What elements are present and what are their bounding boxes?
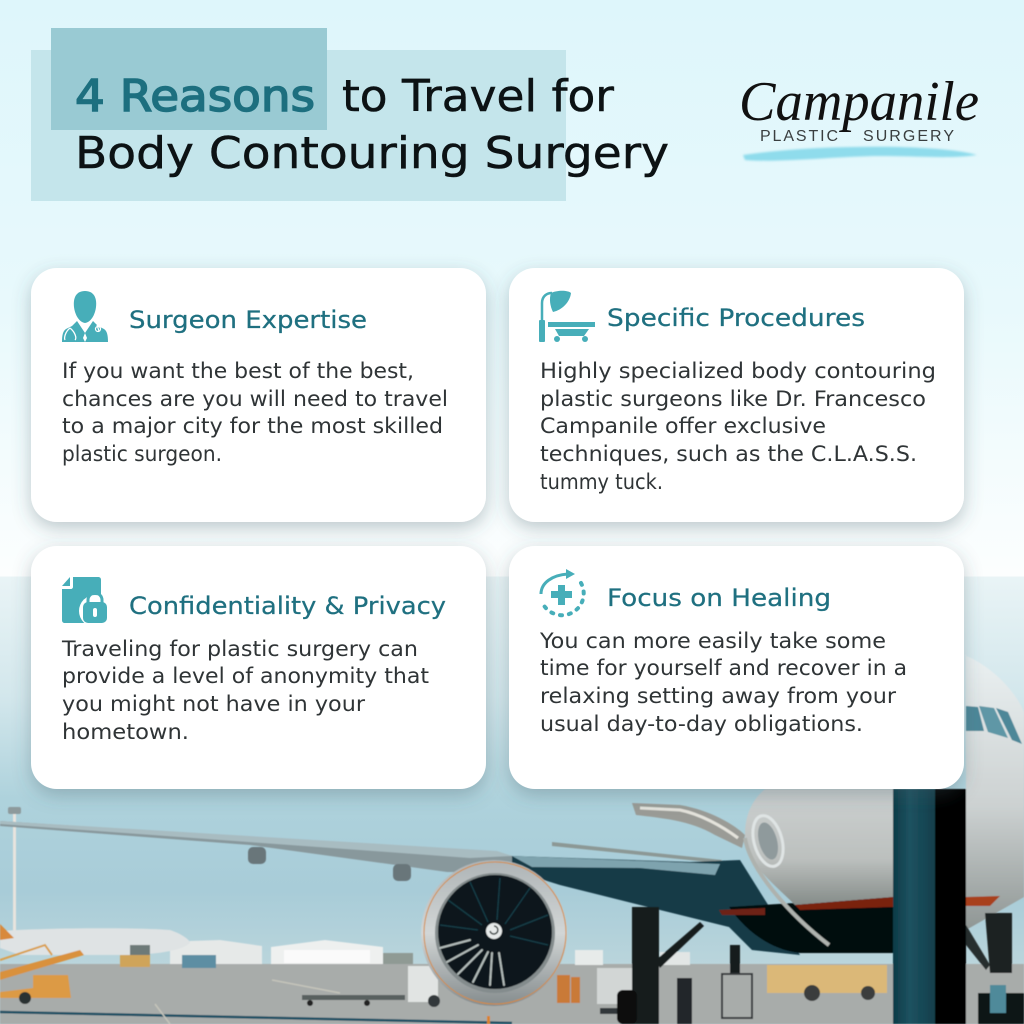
landing gear (617, 907, 704, 1024)
icon: operating table and lamp (539, 291, 595, 342)
window pillar (893, 789, 966, 1024)
panel: confidentiality and privacy (31, 546, 486, 789)
title block (31, 28, 669, 201)
fuselage far side (964, 655, 1024, 930)
heading: Confidentiality & Privacy (129, 592, 446, 620)
body text: You can more easily take some (539, 629, 886, 653)
title line two: Body Contouring Surgery (75, 128, 669, 179)
wing (0, 821, 520, 881)
body text: relaxing setting away from your (540, 684, 896, 708)
distant hangars (170, 940, 690, 968)
body text: plastic surgeon. (62, 442, 222, 466)
icon: doctor (62, 291, 108, 342)
ground vehicles (120, 955, 887, 1014)
body text: plastic surgeons like Dr. Francesco (540, 387, 926, 411)
title accent words: 4 Reasons (75, 71, 315, 122)
jet engine (421, 860, 567, 1006)
ground (0, 964, 1024, 1024)
body text: Traveling for plastic surgery can (61, 637, 418, 661)
body text: provide a level of anonymity that (62, 664, 429, 688)
fuselage nose section (719, 789, 893, 945)
baggage loader (0, 945, 84, 1004)
body text: hometown. (62, 720, 189, 744)
body text: Highly specialized body contouring (540, 359, 936, 383)
panel: specific procedures (509, 268, 964, 522)
body text (61, 637, 429, 744)
heading: Focus on Healing (607, 584, 831, 612)
logo: Campanile Plastic Surgery (739, 71, 979, 161)
icon: document with padlock (62, 577, 111, 627)
logo tagline surgery: SURGERY (863, 128, 954, 145)
body text (62, 359, 448, 466)
distant airliner (0, 924, 190, 955)
title highlight large (31, 50, 566, 201)
body text: If you want the best of the best, (62, 359, 414, 383)
title line one: to Travel for (342, 71, 615, 122)
logo brush stroke (743, 147, 977, 161)
light mast (8, 807, 21, 940)
nose gear and worker (966, 913, 1024, 1024)
body text: Campanile offer exclusive (540, 414, 826, 438)
body text: time for yourself and recover in a (540, 656, 907, 680)
wing root and belly (512, 842, 893, 955)
body text: tummy tuck. (540, 470, 663, 494)
cone marker (487, 1016, 490, 1024)
body text: chances are you will need to travel (62, 387, 448, 411)
body text: to a major city for the most skilled (62, 414, 443, 438)
ground crew and stand (677, 945, 752, 1024)
icon: medical cross with circular arrow (541, 569, 584, 615)
body text (540, 359, 936, 494)
body text: usual day-to-day obligations. (540, 712, 863, 736)
logo script: Campanile (739, 71, 979, 133)
airport photo (0, 655, 1024, 1024)
heading: Specific Procedures (607, 304, 865, 332)
panel: focus on healing (509, 546, 964, 789)
logo tagline plastic: PLASTIC (760, 128, 838, 145)
body text (539, 629, 907, 736)
body text: you might not have in your (62, 692, 365, 716)
heading: Surgeon Expertise (129, 306, 367, 334)
title highlight small (51, 28, 327, 130)
body text: techniques, such as the C.L.A.S.S. (540, 442, 917, 466)
panel: surgeon expertise (31, 268, 486, 522)
open door (632, 803, 745, 848)
